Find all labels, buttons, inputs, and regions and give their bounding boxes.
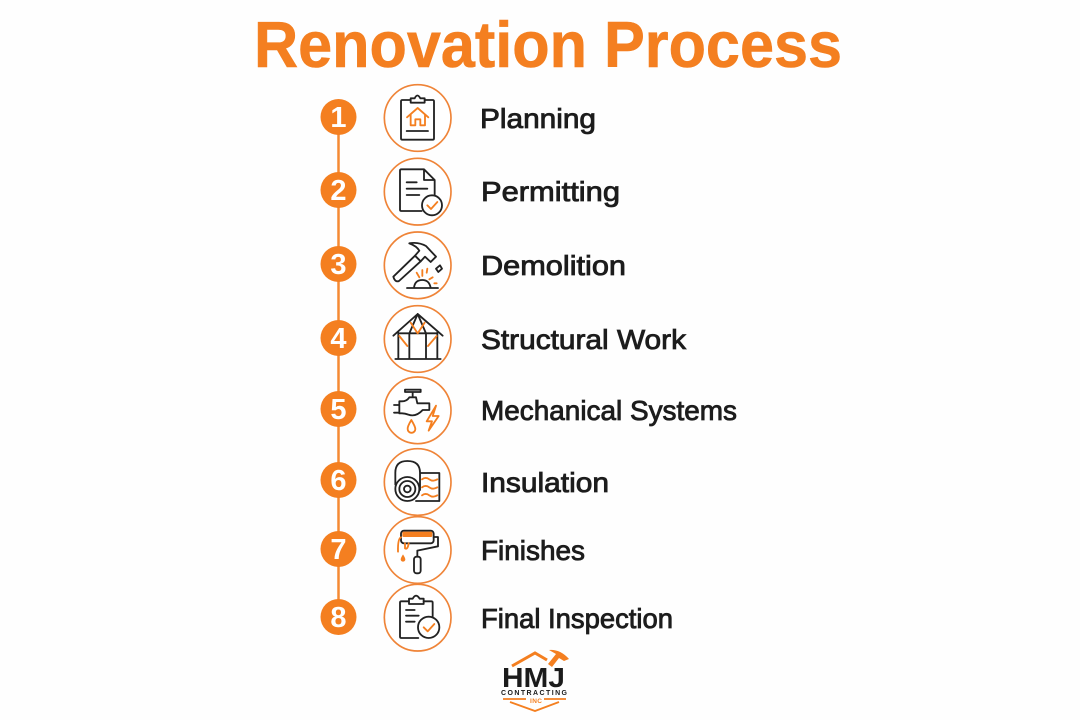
number badge 2: 2 bbox=[330, 175, 347, 207]
logo base chevron bbox=[503, 699, 566, 711]
icon: document with check bbox=[384, 158, 451, 225]
label: Finishes: Finishes bbox=[481, 535, 585, 566]
step 3: demolition bbox=[320, 232, 626, 299]
logo roof and hammer bbox=[512, 653, 547, 666]
number badge 7: 7 bbox=[330, 534, 347, 566]
timeline connector line bbox=[337, 117, 340, 617]
logo hammer bbox=[548, 650, 569, 667]
label: Final Inspection: Final Inspection bbox=[481, 603, 673, 634]
number badge 3: 3 bbox=[330, 249, 347, 281]
number badge 4: 4 bbox=[330, 323, 347, 355]
icon: house framing bbox=[384, 306, 451, 372]
number badge 1: 1 bbox=[330, 102, 347, 134]
label: Structural Work: Structural Work bbox=[481, 324, 687, 355]
icon: clipboard with check bbox=[384, 584, 451, 651]
number badge 4 bbox=[320, 320, 356, 356]
icon: hammer breaking surface bbox=[384, 232, 451, 299]
logo subtitle: CONTRACTING bbox=[501, 690, 568, 697]
icon: valve, water drop and lightning bbox=[384, 377, 451, 444]
step 7: finishes bbox=[320, 517, 585, 583]
step 2: permitting bbox=[320, 158, 620, 225]
number badge 8 bbox=[320, 599, 356, 635]
icon: clipboard with house bbox=[384, 85, 451, 151]
number badge 6: 6 bbox=[330, 465, 347, 497]
title: Renovation Process bbox=[254, 8, 842, 81]
logo wordmark: HMJ bbox=[502, 662, 565, 693]
number badge 6 bbox=[320, 462, 356, 498]
number badge 3 bbox=[320, 246, 356, 282]
number badge 7 bbox=[320, 531, 356, 567]
icon: insulation roll bbox=[384, 449, 451, 515]
number badge 5 bbox=[320, 391, 356, 427]
step 1: planning bbox=[320, 85, 596, 151]
step 4: structural work bbox=[320, 306, 687, 372]
step 5: mechanical systems bbox=[320, 377, 737, 444]
label: Mechanical Systems: Mechanical Systems bbox=[481, 395, 737, 426]
number badge 2 bbox=[320, 172, 356, 208]
label: Insulation: Insulation bbox=[481, 467, 609, 498]
label: Demolition: Demolition bbox=[481, 250, 626, 281]
logo: HMJ Contracting Inc bbox=[501, 650, 569, 711]
number badge 1 bbox=[320, 99, 356, 135]
logo inc: INC bbox=[530, 698, 542, 705]
label: Permitting: Permitting bbox=[481, 176, 620, 207]
label: Planning: Planning bbox=[480, 103, 596, 134]
step 6: insulation bbox=[320, 449, 609, 515]
number badge 8: 8 bbox=[330, 602, 347, 634]
number badge 5: 5 bbox=[330, 394, 347, 426]
step 8: final inspection bbox=[320, 584, 673, 651]
icon: paint roller bbox=[384, 517, 451, 583]
